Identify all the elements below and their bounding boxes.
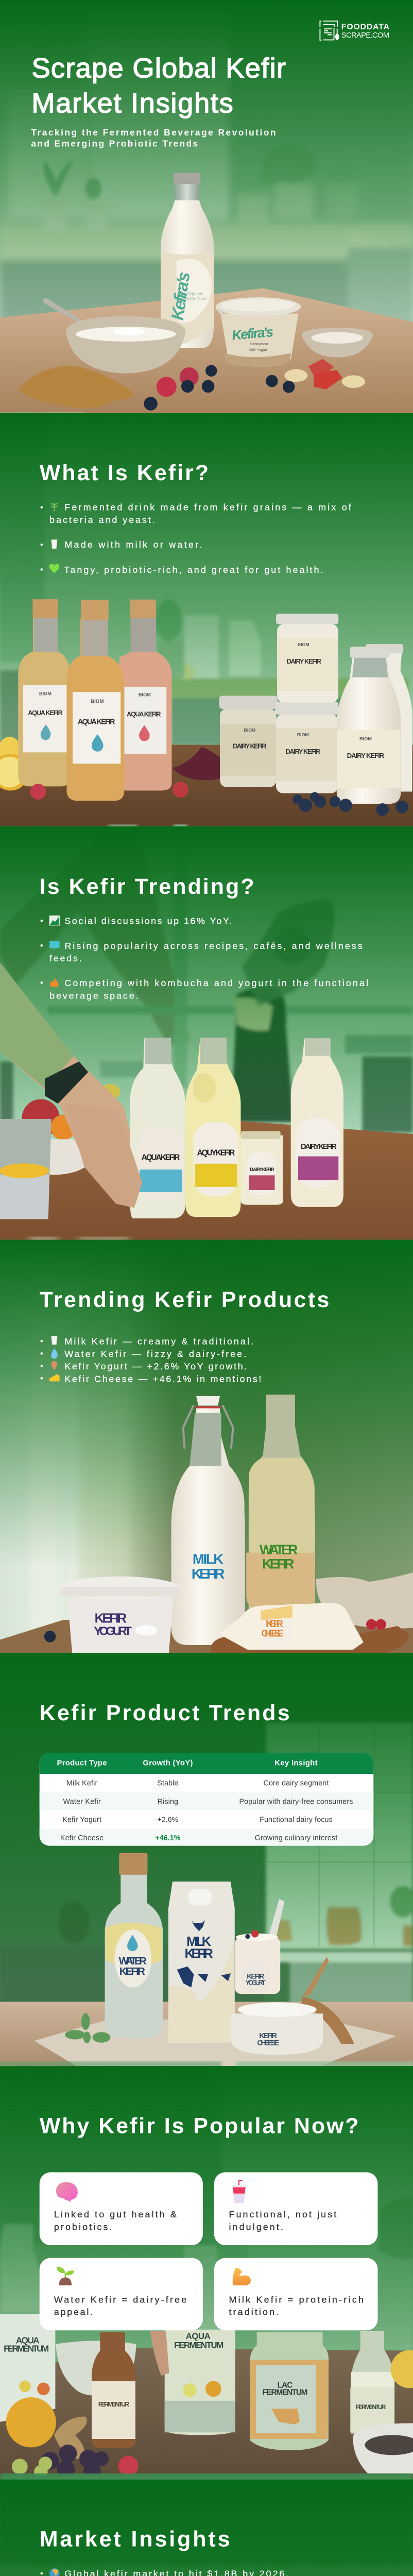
bullet list <box>41 502 351 575</box>
bowl: kefir cheese: CHEESE <box>257 2039 279 2047</box>
heading: Why Kefir Is Popular Now? <box>40 2114 359 2139</box>
bullet list: Water Kefir — fizzy & dairy-free. <box>64 1349 246 1359</box>
bullet list: beverage space. <box>49 991 139 1001</box>
wooden tabletop <box>0 1611 413 1656</box>
icon: fire <box>50 978 59 987</box>
three aqua kefir bottles: AQUA KEFIR <box>28 709 63 717</box>
tub: kefir yogurt <box>60 1577 180 1656</box>
table header: Key Insight <box>274 1759 318 1768</box>
bottle: aqua fermentum left: AQUA <box>16 2335 40 2345</box>
tub: kefir yogurt: YOGURT <box>94 1624 132 1637</box>
panel: kefir product trends <box>0 1653 413 2066</box>
jars of dairy kefir: BIOM <box>298 642 309 647</box>
carton: milk kefir: MILK <box>186 1935 212 1949</box>
card: functional: Functional, not just <box>229 2209 336 2219</box>
table header: Product Type <box>57 1759 107 1768</box>
row: kefir cheese: Growing culinary interest <box>255 1834 337 1842</box>
heading: What Is Kefir? <box>40 461 209 485</box>
bullet list: Competing with kombucha and yogurt in the functional <box>64 978 368 988</box>
green gradient overlay <box>0 413 413 827</box>
icon: brain <box>56 2182 78 2202</box>
jars of dairy kefir: BIOM <box>297 732 309 737</box>
card: gut health <box>40 2172 203 2245</box>
jars of dairy kefir: DAIRY KEFIR <box>287 657 321 665</box>
bottle: aqua fermentum center <box>165 2330 235 2435</box>
bottle: kefir drink: Original <box>187 291 202 296</box>
icon: water drop <box>51 1348 58 1359</box>
bottle: water kefir: WATER <box>119 1955 147 1967</box>
bottle: aqua fermentum center: AQUA <box>186 2331 211 2341</box>
title <box>31 53 286 118</box>
card: water kefir <box>40 2258 203 2330</box>
trends background scene <box>0 1653 413 2069</box>
row: kefir yogurt <box>62 1816 333 1824</box>
wooden table <box>0 289 413 414</box>
milk bottles: BIOM <box>359 736 372 741</box>
icon: milk glass <box>51 1336 57 1345</box>
ginger <box>54 2417 87 2459</box>
table header <box>40 1753 373 1774</box>
bullet list: Rising popularity across recipes, cafés, and wellness <box>64 941 363 951</box>
jar: lac fermentum: LAC <box>278 2381 292 2389</box>
bottle: milk kefir: MILK <box>193 1551 223 1567</box>
row: kefir cheese: Kefir Cheese <box>60 1834 104 1842</box>
logo: fooddata scrape: FOODDATA <box>341 23 389 31</box>
icon: cheese <box>49 1374 60 1381</box>
milk bottles: DAIRY KEFIR <box>347 752 385 759</box>
bottle: kefir drink: Kefir Drink <box>187 296 206 301</box>
bottle: dairykefir <box>291 1038 343 1207</box>
carton: milk kefir: KEFIR <box>185 1947 213 1961</box>
fresh berries and banana <box>144 359 365 411</box>
wood table <box>0 745 413 829</box>
jars of dairy kefir: BIOM <box>244 727 255 733</box>
striped rows <box>40 1792 373 1846</box>
card: gut health: Linked to gut health & <box>54 2209 177 2219</box>
title: Market Insights <box>31 88 233 118</box>
fruit bowl <box>16 1084 120 1175</box>
bottle: water kefir <box>246 1395 315 1626</box>
row: milk kefir: Stable <box>157 1779 178 1787</box>
icon: globe <box>49 2568 60 2576</box>
what-is-kefir background scene <box>0 412 413 827</box>
bullet list: Tangy, probiotic-rich, and great for gut health. <box>64 565 323 575</box>
card: milk kefir: Milk Kefir = protein-rich <box>229 2295 364 2305</box>
subtitle: Tracking the Fermented Beverage Revolution <box>31 127 276 138</box>
icon: green heart <box>49 564 59 573</box>
green gradient overlay <box>0 1240 413 1656</box>
heading: Market Insights <box>40 2527 230 2552</box>
green gradient overlay <box>0 2480 413 2576</box>
bullet list: Fermented drink made from kefir grains — a mix of <box>64 502 351 512</box>
title: Scrape Global Kefir <box>31 53 286 83</box>
bottle: aqua fermentum left: FERMENTUM <box>4 2344 49 2354</box>
lemon right <box>391 2350 413 2388</box>
row: kefir yogurt: Functional dairy focus <box>260 1816 333 1824</box>
bottle: aquykefir: AQUYKEFIR <box>197 1148 235 1157</box>
wood table <box>0 2348 413 2482</box>
heading: Kefir Product Trends <box>40 1701 290 1725</box>
water glass <box>0 1119 51 1219</box>
table body <box>40 1753 373 1846</box>
card: water kefir: Water Kefir = dairy-free <box>54 2295 186 2305</box>
bottle: fruit blend: FERMENTUR <box>98 2400 130 2408</box>
bullet list: bacteria and yeast. <box>49 515 155 525</box>
green grapes <box>12 2456 52 2479</box>
bottle: aqua fermentum left <box>0 2314 55 2422</box>
data table <box>40 1753 373 1846</box>
grapes <box>41 2445 109 2481</box>
bullet list: Kefir Cheese — +46.1% in mentions! <box>64 1374 261 1384</box>
jar: dairykefir <box>241 1131 283 1205</box>
granola pile <box>19 366 133 409</box>
icon: ice cream <box>51 1361 58 1370</box>
bullet list <box>41 2568 353 2576</box>
jar: lac fermentum <box>250 2332 329 2450</box>
green gradient overlay <box>0 0 413 414</box>
heading: Trending Kefir Products <box>40 1287 329 1312</box>
cheese on board: KEFIR <box>266 1618 283 1629</box>
panel: is kefir trending <box>0 824 413 1240</box>
panel: what is kefir <box>0 412 413 826</box>
subtitle: and Emerging Probiotic Trends <box>31 138 198 148</box>
bottle: aquykefir <box>185 1038 241 1217</box>
row: water kefir <box>63 1798 353 1806</box>
raspberries <box>366 1619 386 1630</box>
lemons <box>0 737 29 791</box>
card: functional: indulgent. <box>229 2222 283 2232</box>
small bottle: cream: FERMENTUR <box>356 2403 386 2411</box>
wood table <box>0 2002 413 2069</box>
green gradient overlay <box>0 1653 413 2069</box>
jars of dairy kefir <box>219 614 338 793</box>
bottle: dairykefir: DAIRYKEFIR <box>301 1143 337 1151</box>
three aqua kefir bottles: AQUA KEFIR <box>127 710 161 718</box>
jar: dairykefir: DAIRYKEFIR <box>250 1167 274 1172</box>
bullet list: Made with milk or water. <box>64 539 202 550</box>
three aqua kefir bottles: BIOM <box>91 699 104 705</box>
row: milk kefir <box>66 1779 329 1787</box>
subtitle <box>31 127 276 148</box>
panel: trending kefir products <box>0 1236 413 2055</box>
row: milk kefir: Core dairy segment <box>264 1779 329 1787</box>
three aqua kefir bottles: BIOM <box>139 692 151 697</box>
card: milk kefir: tradition. <box>229 2307 279 2317</box>
row: kefir yogurt: +2.6% <box>157 1816 179 1824</box>
granola bowl <box>56 2341 136 2396</box>
small bottle: cream <box>350 2331 394 2434</box>
card: functional <box>214 2172 377 2245</box>
yogurt cup: Kefir Yogurt <box>249 348 267 352</box>
bullet list <box>41 916 368 1001</box>
bottle: fruit blend <box>92 2332 135 2448</box>
row: kefir yogurt: Kefir Yogurt <box>62 1816 101 1824</box>
lemon half <box>6 2397 56 2447</box>
icon: cup with straw <box>232 2180 247 2203</box>
green gradient overlay <box>0 826 413 1243</box>
green gradient overlay <box>0 2066 413 2482</box>
three aqua kefir bottles: BIOM <box>39 691 51 696</box>
panel: hero <box>0 6 413 413</box>
trending background scene <box>0 824 413 1243</box>
jars of dairy kefir: DAIRY KEFIR <box>233 742 267 750</box>
bullet list: Kefir Yogurt — +2.6% YoY growth. <box>64 1361 247 1371</box>
bottle: aquakefir: AQUAKEFIR <box>142 1154 180 1162</box>
jar: kefir yogurt <box>235 1899 284 1994</box>
yogurt cup: Kefira's <box>231 324 274 343</box>
yogurt cup: Madagascar <box>250 342 268 346</box>
bowl of yogurt <box>43 298 185 374</box>
bottle: milk kefir: KEFIR <box>192 1566 225 1582</box>
carton: milk kefir <box>168 1882 235 2043</box>
table header: Growth (YoY) <box>143 1759 193 1768</box>
bottle: aquakefir <box>130 1038 185 1218</box>
bowl: kefir cheese <box>231 1957 354 2055</box>
logo: fooddata scrape: SCRAPE.COM <box>341 31 389 40</box>
row: kefir cheese: +46.1% <box>155 1834 181 1842</box>
cheese on board <box>211 1603 409 1656</box>
bottle: kefir drink: Kefira's <box>168 270 194 321</box>
heading: Is Kefir Trending? <box>40 874 254 899</box>
bowl: kefir cheese: KEFIR <box>259 2032 278 2040</box>
blueberry <box>44 1631 56 1642</box>
panel: market insights <box>0 2473 413 2576</box>
bottle: milk kefir <box>171 1396 245 1645</box>
row: water kefir: Rising <box>158 1798 178 1806</box>
jar: kefir yogurt: YOGURT <box>246 1979 266 1987</box>
card: gut health: probiotics. <box>54 2222 112 2232</box>
jar: lac fermentum: FERMENTUM <box>262 2388 307 2397</box>
three aqua kefir bottles: AQUA KEFIR <box>78 718 115 726</box>
icon: flexed biceps <box>233 2268 251 2285</box>
bottle: aqua fermentum center: FERMENTUM <box>174 2341 223 2350</box>
jars of dairy kefir: DAIRY KEFIR <box>285 748 320 755</box>
milk bottles <box>337 644 412 804</box>
icon: seedling <box>56 2267 74 2285</box>
row: kefir cheese <box>60 1834 337 1842</box>
blueberries <box>292 792 408 816</box>
card: water kefir: appeal. <box>54 2307 93 2317</box>
bottle: kefir drink <box>161 173 214 348</box>
raspberry <box>118 2456 139 2476</box>
hand on bottle <box>150 2331 169 2376</box>
bullet list <box>41 1336 261 1384</box>
small bowl of kefir grains <box>302 328 373 358</box>
panel: why kefir is popular <box>0 2061 413 2479</box>
bottle: water kefir: WATER <box>260 1542 298 1557</box>
hand over bottle <box>66 1104 142 1208</box>
store background scene <box>0 2473 413 2576</box>
bottle: water kefir: KEFIR <box>262 1556 294 1571</box>
logo: fooddata scrape <box>320 21 389 40</box>
icon: herb <box>51 503 58 511</box>
arm with smart watch <box>0 963 142 1208</box>
hibiscus and raspberries <box>30 747 220 800</box>
popular background scene <box>0 2061 413 2482</box>
jar: kefir yogurt: KEFIR <box>247 1972 264 1980</box>
hero background kitchen scene <box>0 0 413 414</box>
bullet list: feeds. <box>49 953 82 963</box>
yogurt cup <box>215 297 301 367</box>
icon: glass of milk <box>51 540 57 549</box>
bullet list: Social discussions up 16% YoY. <box>64 916 232 926</box>
row: water kefir: Popular with dairy-free consumers <box>239 1798 353 1806</box>
products background scene <box>0 1236 413 1656</box>
wood table <box>0 1121 413 1243</box>
three aqua kefir bottles <box>18 599 171 801</box>
cheese on board: CHEESE <box>261 1628 283 1638</box>
card: milk kefir <box>214 2258 377 2330</box>
linen cloth <box>316 1572 413 1629</box>
row: water kefir: Water Kefir <box>63 1798 101 1806</box>
icon: trend chart <box>49 916 60 925</box>
bullet list: Milk Kefir — creamy & traditional. <box>64 1336 253 1347</box>
linen placemat <box>34 2018 397 2067</box>
tub: kefir yogurt: KEFIR <box>95 1611 127 1625</box>
icon: speech bubble <box>49 941 60 950</box>
chia bowl <box>353 2423 413 2474</box>
bottle: water kefir <box>105 1853 163 2038</box>
row: milk kefir: Milk Kefir <box>66 1779 97 1787</box>
bottle: water kefir: KEFIR <box>119 1965 145 1977</box>
mint leaves <box>65 2013 110 2043</box>
